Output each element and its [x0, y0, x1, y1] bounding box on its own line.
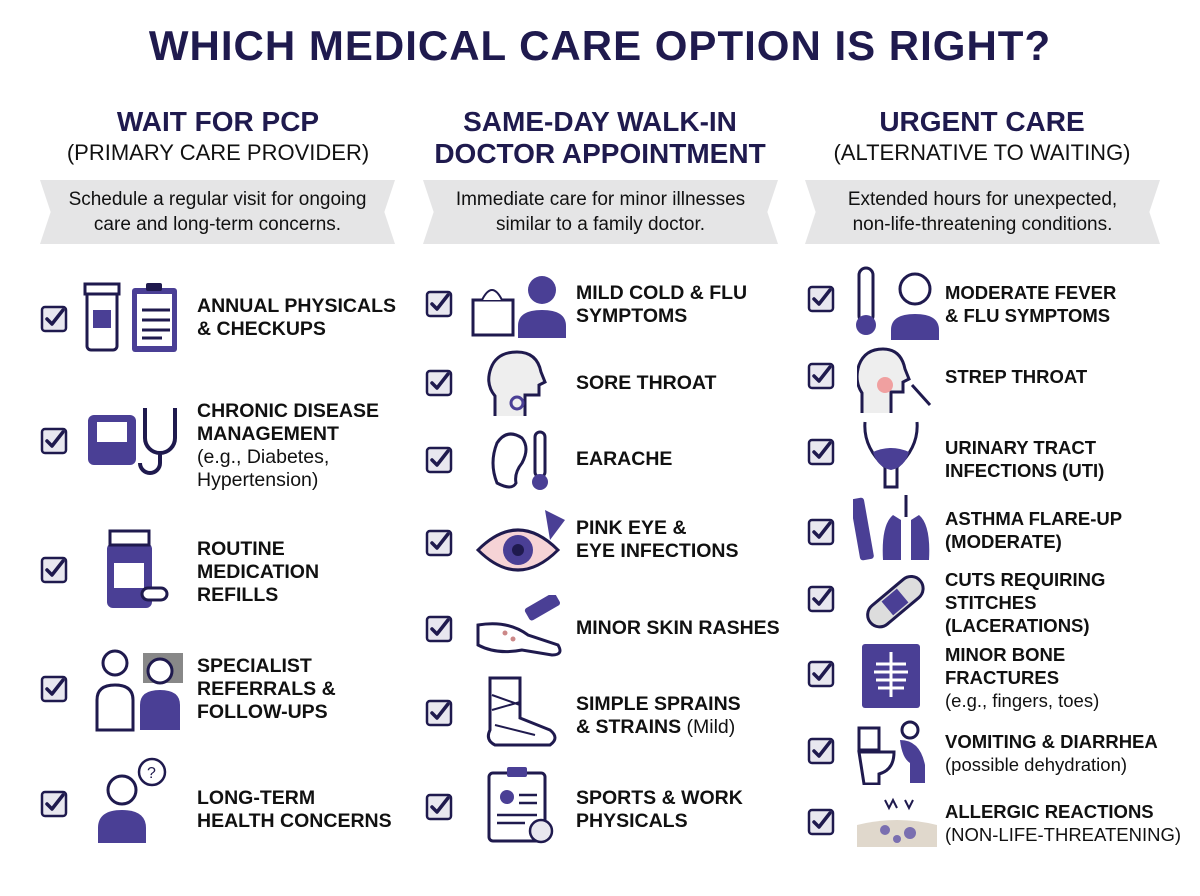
item: fever — [808, 266, 1116, 340]
item: cuts: STITCHES — [945, 592, 1036, 613]
item: chronic disease: CHRONIC DISEASE — [197, 400, 379, 422]
item: strep: STREP THROAT — [945, 366, 1087, 387]
item: earache: EARACHE — [576, 448, 672, 470]
item: asthma — [808, 495, 1122, 560]
item: sports physicals: PHYSICALS — [576, 810, 688, 832]
item: referrals: SPECIALIST — [197, 655, 312, 677]
banner: walk-in: similar to a family doctor. — [496, 214, 705, 235]
banner: PCP: Schedule a regular visit for ongoing — [69, 189, 366, 210]
item: allergic: (NON-LIFE-THREATENING) — [945, 824, 1181, 845]
item: fractures: FRACTURES — [945, 667, 1059, 688]
item: UTI: INFECTIONS (UTI) — [945, 460, 1104, 481]
item: vomiting — [808, 720, 1158, 785]
item: vomiting: (possible dehydration) — [945, 754, 1127, 775]
item: annual physicals: ANNUAL PHYSICALS — [197, 295, 396, 317]
column heading: walk-in: DOCTOR APPOINTMENT — [434, 138, 766, 169]
item: fractures: MINOR BONE — [945, 644, 1065, 665]
item: asthma: (MODERATE) — [945, 531, 1062, 552]
column heading: walk-in — [434, 106, 766, 169]
item: earache — [426, 430, 672, 490]
title: WHICH MEDICAL CARE OPTION IS RIGHT? — [149, 22, 1051, 69]
item: sports physicals: SPORTS & WORK — [576, 787, 743, 809]
item: referrals: REFERRALS & — [197, 678, 336, 700]
panel: urgent care list — [808, 266, 1181, 847]
item: medication refills — [40, 530, 319, 608]
item: fever: MODERATE FEVER — [945, 282, 1116, 303]
item: pink eye — [426, 510, 739, 572]
item: chronic disease: (e.g., Diabetes, — [197, 446, 329, 468]
item: annual physicals — [40, 282, 396, 352]
item: asthma: ASTHMA FLARE-UP — [945, 508, 1122, 529]
column heading: PCP: WAIT FOR PCP — [117, 106, 319, 137]
item: pink eye: PINK EYE & — [576, 517, 687, 539]
item: allergic — [808, 798, 1181, 847]
item: medication refills: MEDICATION — [197, 561, 319, 583]
banner: urgent care: non-life-threatening conditions. — [853, 214, 1112, 235]
item: long-term concerns — [40, 758, 392, 843]
item: referrals — [40, 650, 336, 732]
item: cuts: CUTS REQUIRING — [945, 569, 1105, 590]
banner: walk-in: Immediate care for minor illnesses — [456, 189, 745, 210]
banner: urgent care — [805, 180, 1160, 244]
banner: PCP: care and long-term concerns. — [94, 214, 341, 235]
item: UTI — [808, 422, 1104, 488]
item: long-term concerns: LONG-TERM — [197, 787, 315, 809]
item: cold flu: MILD COLD & FLU — [576, 282, 747, 304]
column heading: urgent care: (ALTERNATIVE TO WAITING) — [833, 140, 1131, 165]
item: cuts: (LACERATIONS) — [945, 615, 1090, 636]
item: long-term concerns: ? — [147, 765, 156, 782]
item: fever: & FLU SYMPTOMS — [945, 305, 1110, 326]
column heading: PCP — [67, 106, 369, 165]
item: UTI: URINARY TRACT — [945, 437, 1096, 458]
panel: PCP list — [40, 282, 396, 843]
item: skin rashes: MINOR SKIN RASHES — [576, 617, 780, 639]
banner: PCP — [40, 180, 395, 244]
item: long-term concerns: HEALTH CONCERNS — [197, 810, 392, 832]
item: chronic disease — [40, 400, 379, 491]
item: sprains: SIMPLE SPRAINS — [576, 693, 741, 715]
item: chronic disease: MANAGEMENT — [197, 423, 339, 445]
column heading: urgent care — [833, 106, 1131, 165]
item: vomiting: VOMITING & DIARRHEA — [945, 731, 1158, 752]
item: sports physicals — [426, 767, 743, 844]
banner: walk-in — [423, 180, 778, 244]
column heading: PCP: (PRIMARY CARE PROVIDER) — [67, 140, 369, 165]
item: referrals: FOLLOW-UPS — [197, 701, 328, 723]
column heading: walk-in: SAME-DAY WALK-IN — [463, 106, 737, 137]
item: medication refills: ROUTINE — [197, 538, 285, 560]
item: fractures: (e.g., fingers, toes) — [945, 690, 1099, 711]
item: sore throat — [426, 350, 716, 416]
item: strep — [808, 348, 1087, 413]
item: fractures — [808, 644, 1099, 711]
item: annual physicals: & CHECKUPS — [197, 318, 326, 340]
banner: urgent care: Extended hours for unexpected, — [848, 189, 1117, 210]
item: cuts — [808, 569, 1105, 636]
item: allergic: ALLERGIC REACTIONS — [945, 801, 1154, 822]
item: skin rashes — [426, 595, 780, 656]
item: sore throat: SORE THROAT — [576, 372, 716, 394]
item: sprains: & STRAINS (Mild) — [576, 716, 735, 738]
panel: walk-in list — [426, 276, 780, 844]
item: pink eye: EYE INFECTIONS — [576, 540, 739, 562]
item: cold flu — [426, 276, 747, 338]
item: medication refills: REFILLS — [197, 584, 278, 606]
item: sprains — [426, 676, 741, 746]
item: cold flu: SYMPTOMS — [576, 305, 687, 327]
item: chronic disease: Hypertension) — [197, 469, 318, 491]
column heading: urgent care: URGENT CARE — [879, 106, 1085, 137]
